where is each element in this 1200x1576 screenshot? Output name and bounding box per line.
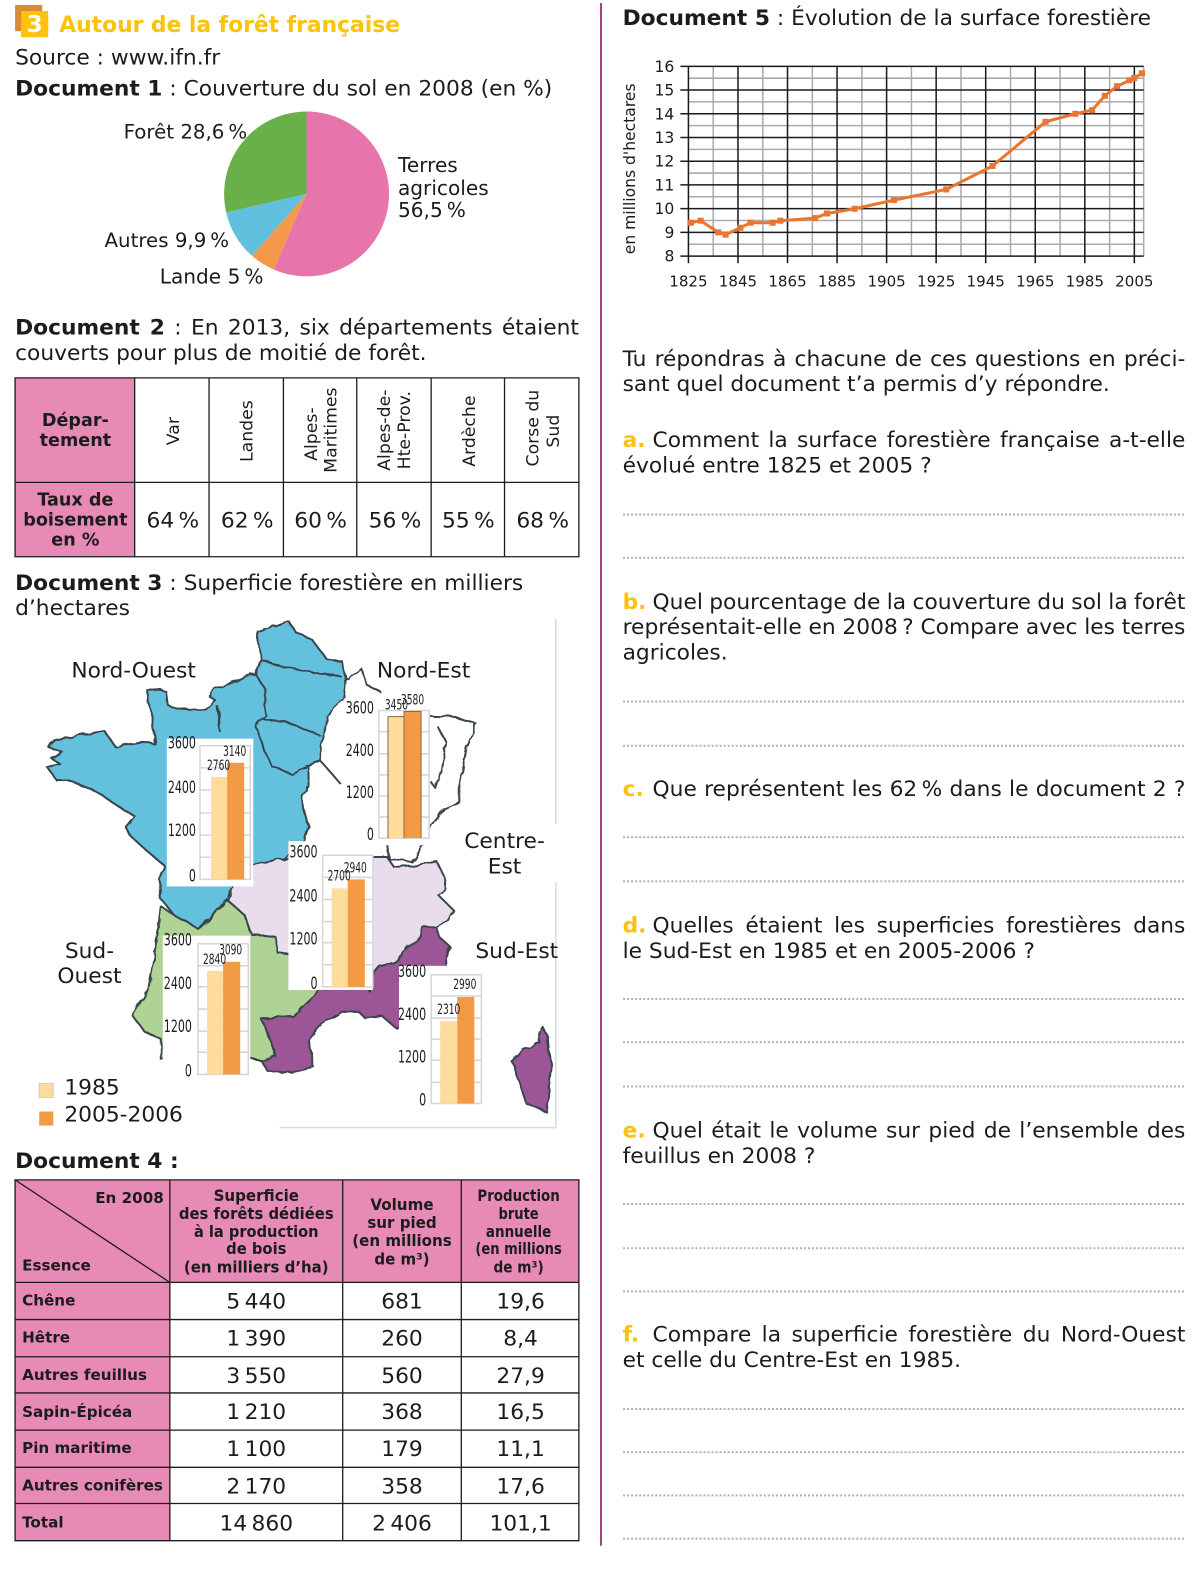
table: wood species: brute	[498, 1205, 538, 1223]
table: departments: Ardèche	[459, 395, 479, 466]
source: Source : www.ifn.fr	[15, 45, 220, 70]
label: Sud-Ouest	[39, 939, 140, 989]
line chart: forest area: 16	[654, 57, 674, 75]
line chart: forest area: 8	[664, 247, 674, 265]
question f	[623, 1323, 1185, 1373]
bar chart: Nord-Est: 3450	[384, 696, 408, 713]
region: Corse	[512, 1026, 551, 1111]
heading: document 1: Document 1 : Couverture du sol en 2008 (en %)	[15, 76, 552, 102]
answer lines a	[0, 514, 1200, 560]
line chart: forest area: 1825	[669, 272, 707, 290]
label: Sud-Est: Sud-Est	[475, 939, 558, 964]
table: departments: Maritimes	[321, 387, 341, 472]
line chart: forest area: 1925	[916, 272, 955, 290]
table: departments: tement	[39, 431, 111, 451]
table: wood species: Sapin-Épicéa	[22, 1402, 132, 1421]
label: Sud-Ouest: Ouest	[57, 964, 122, 989]
table: wood species: 260	[381, 1326, 422, 1351]
question f: f.	[623, 1323, 639, 1348]
heading: document 5: Document 5 : Évolution de la surface forestière	[623, 6, 1151, 31]
table: wood species: sur pied	[367, 1214, 436, 1232]
table: departments: 56 %	[368, 508, 421, 533]
bar chart: Centre-Est: 1200	[289, 929, 317, 949]
bar chart: Sud-Ouest: 2400	[163, 973, 191, 993]
table: departments: 64 %	[146, 508, 199, 533]
bar chart: Sud-Est: 2400	[397, 1005, 426, 1025]
line chart: forest area: 15	[654, 81, 674, 99]
label: terres agricoles: 56,5 %	[398, 198, 466, 222]
bar chart: Sud-Ouest: 0	[184, 1061, 191, 1081]
table: wood species: Superficie	[213, 1186, 298, 1204]
region: internal borders	[218, 659, 341, 773]
table: departments: Corse du	[523, 389, 543, 466]
map of France	[47, 621, 551, 1111]
bar chart: Sud-Est: 2310	[437, 1001, 460, 1018]
bar chart: Centre-Est: 2940	[343, 859, 366, 876]
table: wood species: Autres feuillus	[22, 1365, 146, 1383]
label: forêt: Forêt 28,6 %	[124, 121, 247, 144]
line chart: forest area: en millions d'hectares	[621, 83, 639, 254]
table: wood species: des forêts dédiées	[178, 1205, 333, 1223]
legend: years	[39, 1075, 182, 1127]
line chart: forest area: 11	[654, 176, 674, 194]
table: wood species: 560	[381, 1363, 422, 1388]
table: wood species: En 2008	[95, 1188, 163, 1206]
bar chart: Centre-Est: 2400	[289, 886, 317, 906]
bar chart: Nord-Ouest	[166, 733, 253, 886]
question c: c.	[623, 777, 644, 802]
line chart: forest area: 10	[654, 200, 674, 218]
bar chart: Centre-Est: 3600	[289, 842, 317, 862]
label: terres agricoles	[398, 154, 489, 222]
bar chart: Nord-Ouest: 1200	[167, 821, 195, 841]
bar chart: Sud-Est: 1200	[397, 1047, 426, 1067]
label: Centre-Est: Centre-	[464, 829, 545, 854]
bar chart: Centre-Est: 2700	[327, 867, 350, 884]
legend: years: 2005-2006	[64, 1102, 182, 1127]
table: wood species: 27,9	[496, 1363, 544, 1388]
table: wood species: de bois	[226, 1240, 286, 1258]
question b	[623, 590, 1185, 665]
table: wood species: (en millions	[352, 1232, 451, 1250]
table: departments: Sud	[543, 414, 563, 447]
line chart: forest area: 1865	[768, 272, 806, 290]
pie chart: land cover	[224, 111, 389, 276]
line chart: forest area	[621, 57, 1153, 290]
heading: document 2	[15, 316, 579, 366]
question a: évolué entre 1825 et 2005 ?	[623, 453, 932, 478]
table: wood species: de m³)	[374, 1250, 429, 1268]
heading: document 3	[15, 571, 579, 621]
map region labels: Nord-Ouest	[71, 658, 196, 683]
table: departments: boisement	[23, 510, 127, 530]
answer lines e	[0, 1203, 1200, 1293]
pie labels	[100, 119, 412, 291]
question a: a.	[623, 428, 646, 453]
bar chart: Sud-Est: 3600	[397, 961, 426, 981]
table: wood species: annuelle	[485, 1223, 551, 1241]
bar chart: Nord-Ouest: 3600	[167, 733, 195, 753]
table: wood species: 14 860	[219, 1511, 293, 1536]
bar chart: Sud-Est: 2990	[453, 975, 476, 992]
label: Nord-Est: Nord-Est	[377, 658, 470, 683]
region: Nord-Est outline	[320, 661, 476, 861]
question d: d.	[623, 914, 646, 939]
table: departments: Hte-Prov.	[395, 390, 415, 469]
bar chart: Sud-Ouest: 3090	[219, 941, 242, 958]
line chart: forest area: 14	[654, 105, 674, 123]
question e: e.	[623, 1119, 646, 1144]
question d	[623, 914, 1185, 964]
heading: document 3: d’hectares	[15, 596, 130, 621]
table: departments: Taux de	[37, 490, 113, 510]
heading: document 2: couverts pour plus de moitié de forêt.	[15, 341, 427, 366]
table: wood species: 1 390	[226, 1326, 286, 1351]
table: departments: 68 %	[516, 508, 569, 533]
question b: Quel pourcentage de la couverture du sol la forêt	[653, 590, 1185, 615]
bar chart: Centre-Est	[288, 841, 372, 993]
table: wood species: Autres conifères	[22, 1476, 162, 1494]
answer lines f	[0, 1408, 1200, 1541]
table: departments: Landes	[237, 400, 257, 462]
icon: exercise number 3	[15, 5, 48, 38]
table: wood species: 179	[381, 1437, 422, 1462]
region: Centre-Est	[228, 856, 454, 990]
column divider	[599, 3, 601, 1545]
table: departments: 60 %	[294, 508, 346, 533]
question b: représentait-elle en 2008 ? Compare avec les terres	[623, 615, 1185, 640]
label: Centre-Est: Est	[488, 854, 521, 879]
table: departments: 62 %	[220, 508, 273, 533]
bar chart: Sud-Ouest	[162, 930, 250, 1081]
question d: le Sud-Est en 1985 et en 2005-2006 ?	[623, 939, 1035, 964]
icon: exercise number 3: 3	[26, 12, 42, 38]
bar chart: Sud-Ouest: 2840	[203, 950, 226, 967]
bar chart: Nord-Ouest: 2760	[207, 756, 230, 773]
table: wood species: 5 440	[226, 1289, 286, 1314]
table: wood species	[15, 1179, 578, 1540]
question f: et celle du Centre-Est en 1985.	[623, 1348, 961, 1373]
question b: b.	[623, 590, 646, 615]
table: departments: Var	[163, 416, 183, 445]
question c: Que représentent les 62 % dans le document 2 ?	[653, 777, 1185, 802]
table: wood species: 16,5	[496, 1400, 544, 1425]
table: departments	[15, 377, 578, 556]
bar chart: Nord-Ouest: 0	[188, 866, 195, 886]
heading: document 2: Document 2 : En 2013, six départements étaient	[15, 316, 579, 341]
legend: years: 1985	[64, 1075, 119, 1100]
question a	[623, 428, 1185, 478]
line chart: forest area: 1985	[1065, 272, 1103, 290]
table: departments: Dépar-	[41, 411, 108, 431]
table: wood species: 8,4	[503, 1326, 537, 1351]
table: wood species: Chêne	[22, 1291, 75, 1309]
table: wood species: Pin maritime	[22, 1439, 131, 1457]
question e: Quel était le volume sur pied de l’ensemble des	[653, 1119, 1185, 1144]
table: wood species: 17,6	[496, 1474, 544, 1499]
table: wood species: 1 100	[226, 1437, 286, 1462]
bar chart: Sud-Est: 0	[419, 1090, 426, 1110]
table: wood species: Hêtre	[22, 1328, 70, 1346]
line chart: forest area: 1965	[1016, 272, 1054, 290]
table: wood species: Essence	[22, 1256, 90, 1274]
bar chart: Nord-Est	[343, 691, 429, 845]
table: wood species: 11,1	[496, 1437, 544, 1462]
table: wood species: (en milliers d’ha)	[183, 1258, 328, 1276]
bar chart: Nord-Est: 1200	[345, 782, 373, 802]
bar chart: Centre-Est: 0	[310, 973, 317, 993]
line chart: forest area: 2005	[1115, 272, 1153, 290]
question a: Comment la surface forestière française a-t-elle	[653, 428, 1185, 453]
table: wood species: 1 210	[226, 1400, 286, 1425]
question f: Compare la superficie forestière du Nord-Ouest	[653, 1323, 1185, 1348]
table: departments: Alpes-	[302, 407, 322, 460]
question d: Quelles étaient les superficies forestières dans	[653, 914, 1185, 939]
table: wood species: Production	[477, 1186, 559, 1204]
instructions: sant quel document t’a permis d’y répondre.	[623, 372, 1110, 397]
table: wood species: 19,6	[496, 1289, 544, 1314]
bar chart: Nord-Ouest: 2400	[167, 777, 195, 797]
heading: document 3: Document 3 : Superficie forestière en milliers	[15, 571, 523, 596]
table: wood species: 2 406	[372, 1511, 431, 1536]
answer lines c	[0, 836, 1200, 882]
line chart: forest area: 12	[654, 152, 674, 170]
table: wood species: à la production	[193, 1223, 318, 1241]
answer lines b	[0, 700, 1200, 747]
line chart: forest area: 1945	[966, 272, 1004, 290]
bar chart: Nord-Ouest: 3140	[223, 742, 246, 759]
table: wood species: (en millions	[475, 1240, 561, 1258]
bar chart: Nord-Est: 3580	[400, 691, 424, 708]
table: wood species: Volume	[370, 1196, 433, 1214]
label: Centre-Est	[442, 829, 567, 879]
label: Sud-Ouest: Sud-	[65, 939, 114, 964]
line chart: forest area: 1905	[867, 272, 905, 290]
label: terres agricoles: Terres	[398, 153, 458, 177]
region: Sud-Ouest	[132, 900, 320, 1060]
question b: agricoles.	[623, 640, 728, 665]
table: wood species: 368	[381, 1400, 422, 1425]
table: wood species: 358	[381, 1474, 422, 1499]
bar chart: Nord-Est: 2400	[345, 740, 373, 760]
table: departments: Alpes-de-	[374, 389, 394, 470]
label: lande: Lande 5 %	[160, 264, 263, 288]
heading: exercise title: Autour de la forêt française	[59, 13, 400, 38]
label: autres: Autres 9,9 %	[105, 229, 229, 252]
table: wood species: 2 170	[226, 1474, 286, 1499]
bar chart: Nord-Est: 0	[366, 825, 373, 845]
map frame	[279, 619, 555, 1127]
table: departments: en %	[51, 530, 99, 550]
answer lines d	[0, 998, 1200, 1088]
question e: feuillus en 2008 ?	[623, 1144, 815, 1169]
instructions	[623, 347, 1185, 397]
table: departments: 55 %	[441, 508, 494, 533]
bar chart: Sud-Est	[397, 961, 485, 1112]
line chart: forest area: 1845	[718, 272, 757, 290]
line chart: forest area: 1885	[817, 272, 856, 290]
region: Sud-Est	[261, 926, 449, 1071]
heading: document 4: Document 4 :	[15, 1149, 179, 1174]
label: terres agricoles: agricoles	[398, 175, 489, 199]
table: wood species: Total	[22, 1513, 63, 1531]
region: Nord-Ouest	[47, 621, 345, 928]
line chart: forest area: 9	[664, 223, 674, 241]
instructions: Tu répondras à chacune de ces questions en préci-	[623, 347, 1185, 372]
table: wood species: 681	[381, 1289, 422, 1314]
table: wood species: 101,1	[489, 1511, 551, 1536]
bar chart: Sud-Ouest: 1200	[163, 1017, 191, 1037]
table: wood species: 3 550	[226, 1363, 286, 1388]
table: wood species: de m³)	[493, 1258, 543, 1276]
line chart: forest area: 13	[654, 129, 674, 147]
question e	[623, 1119, 1185, 1169]
bar chart: Nord-Est: 3600	[345, 698, 373, 718]
bar chart: Sud-Ouest: 3600	[163, 930, 191, 950]
